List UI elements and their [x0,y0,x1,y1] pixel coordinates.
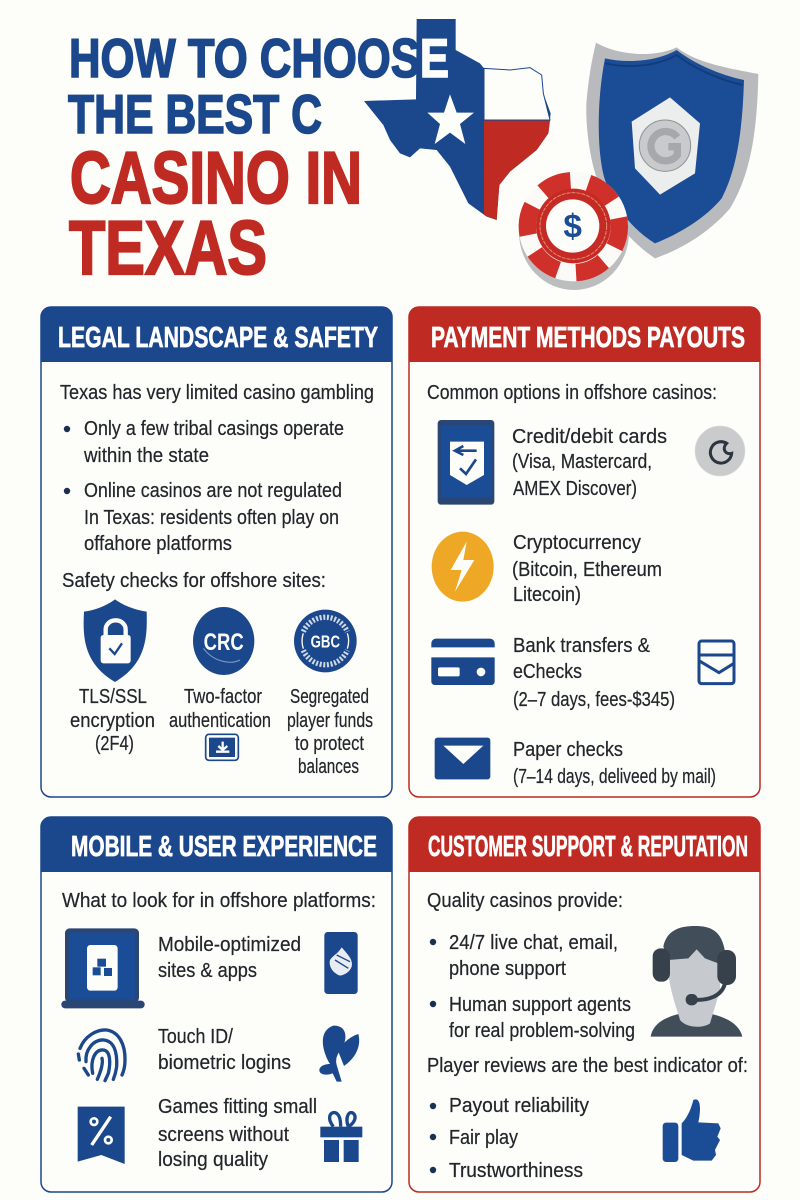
text block: support features and reviews: Quality casinos provide: [427,889,623,912]
text block: legal intro and bullets: within the state [83,444,209,467]
text block: support features and reviews: for real problem-solving [449,1019,635,1042]
icon: crypto lightning [432,532,494,602]
text block: mobile features: Mobile-optimized [158,933,301,956]
title: HOW TO CHOOSE [69,27,449,89]
text block: support features and reviews: 24/7 live chat, email, [449,931,618,954]
text block: legal intro and bullets: Online casinos are not regulated [84,479,342,502]
header: support [409,817,760,872]
text block: payment options: (Visa, Mastercard, [512,450,652,473]
icon: GBC seal: GBC [311,631,340,651]
header: mobile [41,817,392,872]
text block: payment options: Common options in offshore casinos: [427,381,717,404]
icon: outlined envelope [699,641,734,684]
panel: mobile and user experience [41,817,392,1192]
header: payment methods [409,307,760,362]
title: CASINO IN [70,138,362,219]
icon: CRC badge [193,607,254,675]
panel: legal landscape and safety [41,307,392,797]
text block: mobile features: Touch ID/ [158,1025,233,1048]
panel: payment methods [409,307,760,797]
text block: safety check labels [70,685,373,778]
text block: payment options: Bank transfers & [513,634,650,657]
text block: legal intro and bullets: Safety checks for offshore sites: [62,569,326,592]
icon: laptop with phone [61,928,145,1008]
text block: payment options: Paper checks [513,738,623,761]
icon: GBC seal [294,610,357,672]
text block: mobile features [62,889,376,1171]
text block: legal intro and bullets: Texas has very limited casino gambling [60,381,374,404]
text block: payment options: Cryptocurrency [513,531,642,554]
icon: percent tag [78,1107,125,1164]
icon: fingerprint [78,1030,125,1081]
icon: phone with flame [324,932,358,994]
text block: payment options [427,381,717,788]
text block: legal intro and bullets: Only a few tribal casings operate [84,417,344,440]
text block: legal intro and bullets [60,381,374,592]
text block: safety check labels: balances [298,755,359,778]
icon: lock shield [84,599,147,682]
text block: mobile features: sites & apps [158,959,257,982]
title [68,27,449,291]
illustration: casino chip [508,162,638,292]
text block: mobile features: losing quality [158,1148,269,1171]
text block: mobile features: screens without [158,1123,289,1146]
text block: safety check labels: authentication [169,709,271,732]
text block: safety check labels: Two-factor [184,685,262,708]
title: TEXAS [69,206,267,291]
text block: support features and reviews: Human support agents [449,993,631,1016]
text block: support features and reviews: Trustworthiness [449,1159,583,1182]
text block: support features and reviews: Player reviews are the best indicator of: [427,1054,748,1077]
icon: grey coin [695,426,745,476]
heading: mobile: MOBILE & USER EXPERIENCE [71,831,377,863]
text block: support features and reviews: phone support [449,957,566,980]
title: THE BEST C [68,83,322,145]
text block: legal intro and bullets: In Texas: residents often play on [84,506,339,529]
text block: payment options: AMEX Discover) [513,477,637,500]
text block: safety check labels: Segregated [290,685,369,708]
header: legal landscape [41,307,392,362]
text block: payment options: (Bitcoin, Ethereum [512,558,662,581]
icon: paper check envelope [435,738,490,779]
text block: mobile features: Games fitting small [158,1095,317,1118]
icon: bank card [431,639,495,685]
illustration: casino chip: $ [563,208,582,245]
text block: payment options: (2–7 days, fees-$345) [513,688,675,711]
text block: payment options: (7–14 days, deliveed by mail) [513,765,716,788]
text block: support features and reviews: Payout reliability [449,1094,590,1117]
text block: safety check labels: player funds [287,709,373,732]
text block: legal intro and bullets: offahore platforms [84,532,232,555]
text block: support features and reviews [427,889,748,1182]
text block: safety check labels: TLS/SSL [79,685,147,708]
panel: customer support and reputation [409,817,760,1192]
text block: mobile features: What to look for in offshore platforms: [62,889,376,912]
icon: gift box [320,1113,362,1162]
text block: mobile features: biometric logins [158,1051,291,1074]
text block: safety check labels: (2F4) [95,732,134,755]
illustration: Texas flag map [364,19,551,220]
icon: two-factor device [206,734,238,760]
text block: payment options: eChecks [513,660,582,683]
text block: safety check labels: to protect [295,732,364,755]
icon: thumbs up [663,1099,721,1162]
illustration: shield [586,43,758,258]
heading: legal landscape: LEGAL LANDSCAPE & SAFETY [58,322,378,354]
icon: CRC badge: CRC [204,629,244,656]
icon: support agent with headset [651,926,742,1037]
text block: safety check labels: encryption [70,709,155,732]
text block: payment options: Credit/debit cards [512,425,667,448]
text block: support features and reviews: Fair play [449,1126,519,1149]
text block: payment options: Litecoin) [513,583,581,606]
icon: leaf plant [319,1026,359,1082]
icon: card with shield [438,420,494,505]
